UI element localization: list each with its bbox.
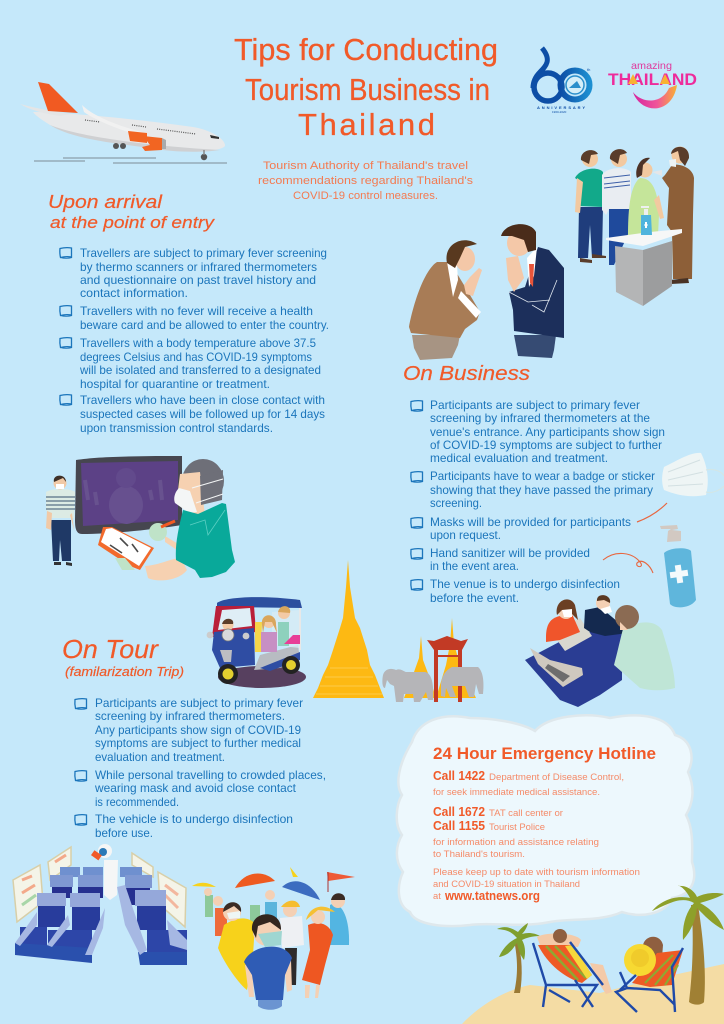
hotline details: www.tatnews.org: [444, 889, 540, 903]
subtitle: [258, 160, 474, 202]
title: Thailand: [298, 107, 435, 142]
illustration: temple and elephants: [382, 618, 483, 702]
hotline details: to Thailand's tourism.: [433, 848, 525, 859]
logo: amazing Thailand: [608, 60, 697, 108]
subtitle: recommendations regarding Thailand's: [258, 175, 474, 187]
hotline details: and COVID-19 situation in Thailand: [433, 878, 580, 889]
section heading: upon arrival: Upon arrival: [48, 192, 163, 212]
illustration: golden stupa: [313, 560, 384, 698]
text block: on tour bullets: Any participants show sign of COVID-19: [95, 724, 301, 737]
text block: upon arrival bullets: Travellers with a body temperature above 37.5: [80, 337, 316, 350]
hotline details: [433, 769, 640, 903]
illustration: hand sanitizer: [660, 525, 696, 607]
illustration: tuk tuk: [207, 597, 306, 688]
subtitle: COVID-19 control measures.: [293, 190, 438, 202]
illustration: meeting group: [525, 595, 675, 707]
text block: on tour bullets: before use.: [95, 827, 153, 840]
hotline details: for seek immediate medical assistance.: [433, 786, 600, 797]
text block: on business bullets: of COVID-19 symptoms are subject to further: [430, 439, 662, 452]
subtitle: Tourism Authority of Thailand's travel: [263, 160, 468, 172]
section heading: upon arrival: [48, 192, 216, 232]
text block: upon arrival bullets: suspected cases will be followed up for 14 days: [80, 408, 325, 421]
hotline details: Call 1155: [433, 819, 485, 833]
text block: on business bullets: The venue is to undergo disinfection: [430, 578, 620, 591]
text block: upon arrival bullets: will be isolated and transferred to a designated: [79, 364, 321, 377]
text block: upon arrival bullets: upon transmission control standards.: [80, 422, 273, 435]
hotline details: TAT call center or: [489, 807, 563, 818]
text block: on business bullets: medical evaluation and treatment.: [430, 452, 608, 465]
logo: 60th anniversary: ANNIVERSARY: [537, 105, 585, 110]
text block: upon arrival bullets: and questionnaire on past travel history and: [80, 274, 316, 287]
decorative arrow: orange loop to sanitizer: [603, 553, 653, 573]
text block: upon arrival bullets: Travellers with no fever will receive a health: [80, 305, 313, 318]
logo: amazing Thailand: amazing: [631, 60, 672, 72]
text block: on tour bullets: wearing mask and avoid close contact: [94, 782, 297, 795]
text block: upon arrival bullets: beware card and be allowed to enter the country.: [80, 319, 329, 332]
text block: on business bullets: Masks will be provided for participants: [430, 516, 631, 529]
text block: on tour bullets: The vehicle is to undergo disinfection: [95, 813, 293, 826]
text block: on tour bullets: Participants are subject to primary fever: [95, 697, 303, 710]
logo: 60th anniversary: 1960-2020: [552, 110, 567, 114]
hotline details: Department of Disease Control,: [489, 771, 624, 782]
illustration: doctor with screen and patient: [46, 456, 235, 580]
logo: amazing Thailand: THAILAND: [608, 71, 697, 89]
hotline heading: 24 Hour Emergency Hotline: [433, 745, 656, 763]
section heading: upon arrival: at the point of entry: [50, 213, 216, 232]
hotline details: at: [433, 890, 441, 901]
text block: upon arrival bullets: degrees Celsius and has COVID-19 symptoms: [80, 351, 312, 364]
title: [234, 32, 498, 142]
text block: on business bullets: Hand sanitizer will be provided: [430, 547, 590, 560]
illustration: airplane: [20, 82, 227, 163]
text block: on business bullets: upon request.: [430, 529, 501, 542]
text block: on tour bullets: evaluation and treatment.: [95, 751, 225, 764]
hotline details: Call 1672: [433, 805, 485, 819]
hotline details: for information and assistance relating: [433, 836, 599, 847]
text block: on business bullets: screening.: [430, 497, 482, 510]
text block: on business bullets: in the event area.: [430, 560, 519, 573]
illustration: businessmen greeting: [409, 224, 564, 360]
illustration: bus seats and sanitizing worker: [13, 844, 187, 965]
text block: on business bullets: venue's entrance. Any participants show sign: [430, 426, 665, 439]
text block: on tour bullets: [75, 697, 326, 840]
text block: upon arrival bullets: [60, 247, 329, 435]
panel: 24 hour emergency hotline cloud: [397, 715, 694, 926]
illustration: crowd of tourists: [192, 867, 355, 1010]
illustration: temperature check queue: [575, 146, 694, 306]
section heading: on business: On Business: [403, 363, 530, 385]
text block: upon arrival bullets: Travellers who have been in close contact with: [80, 394, 325, 407]
text block: upon arrival bullets: by thermo scanners or infrared thermometers: [80, 261, 317, 274]
text block: on tour bullets: symptoms are subject to further medical: [95, 737, 301, 750]
text block: on tour bullets: screening by infrared thermometers.: [95, 710, 285, 723]
text block: on business bullets: [411, 399, 665, 605]
text block: on tour bullets: While personal travelling to crowded places,: [95, 769, 326, 782]
text block: upon arrival bullets: Travellers are subject to primary fever screening: [80, 247, 327, 260]
text block: on business bullets: screening by infrared thermometers at the: [430, 412, 650, 425]
illustration: face mask: [662, 453, 724, 496]
hotline details: Call 1422: [433, 769, 485, 783]
text block: on business bullets: Participants are subject to primary fever: [430, 399, 640, 412]
text block: upon arrival bullets: hospital for quarantine or treatment.: [80, 378, 270, 391]
section heading: on tour: (familarization Trip): [65, 664, 184, 679]
section heading: on tour: On Tour: [62, 634, 159, 664]
illustration: beach scene: [462, 886, 724, 1024]
text block: upon arrival bullets: contact information.: [80, 287, 188, 300]
text block: on tour bullets: is recommended.: [95, 796, 179, 809]
section heading: on tour: [62, 634, 184, 679]
text block: on business bullets: showing that they have passed the primary: [430, 484, 653, 497]
text block: on business bullets: before the event.: [430, 592, 519, 605]
hotline details: Please keep up to date with tourism information: [433, 866, 640, 877]
title: Tips for Conducting: [234, 32, 498, 67]
hotline details: Tourist Police: [489, 821, 545, 832]
title: Tourism Business in: [245, 72, 490, 107]
logo: 60th anniversary: [533, 48, 590, 114]
decorative arrow: orange stroke to mask: [637, 503, 667, 522]
logo: 60th anniversary: th: [587, 67, 590, 72]
text block: on business bullets: Participants have to wear a badge or sticker: [430, 470, 655, 483]
